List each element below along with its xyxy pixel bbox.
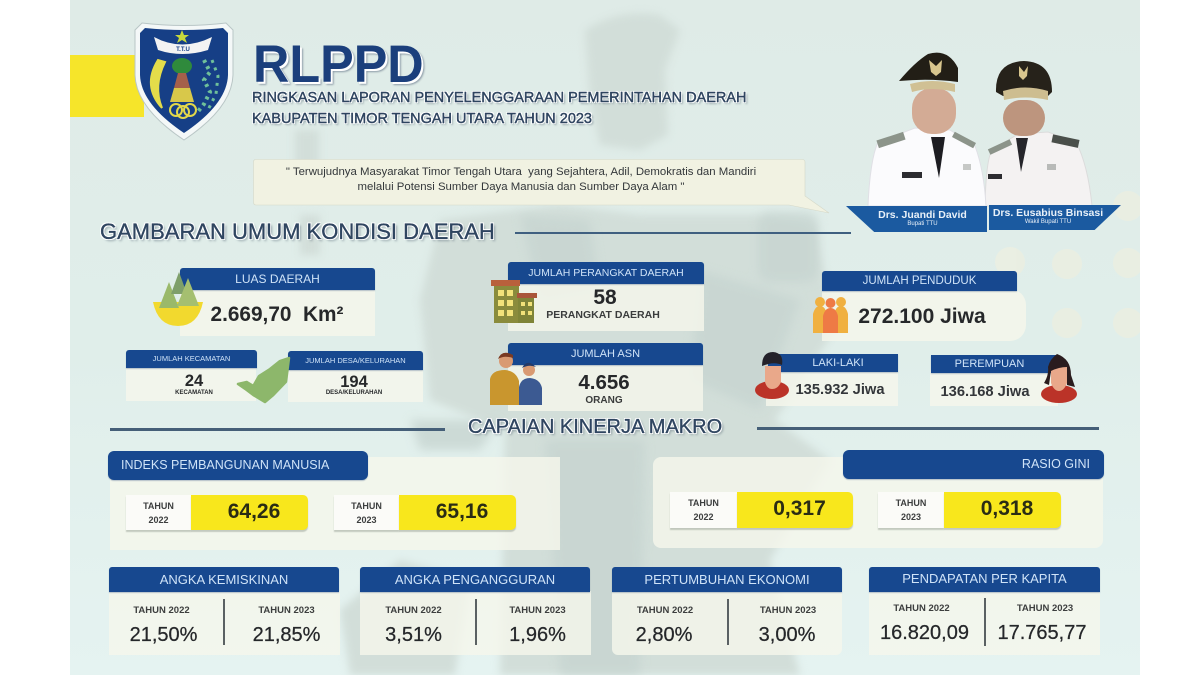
IPM 2023 year: 2023 [356, 515, 377, 525]
panel: jumlah desa [288, 351, 424, 402]
pertumbuhan header: PERTUMBUHAN EKONOMI [644, 572, 810, 587]
pertumbuhan card [612, 591, 842, 655]
pendapatan header: PENDAPATAN PER KAPITA [902, 571, 1067, 586]
heading rule [515, 232, 851, 234]
ASN value: 4.656 [578, 371, 630, 394]
laki-laki card [766, 370, 898, 406]
pengangguran 2023 value: 1,96% [509, 624, 566, 646]
pengangguran header [360, 567, 590, 592]
pertumbuhan 2023 value: 3,00% [759, 624, 815, 646]
IPM card [110, 457, 560, 550]
name plate: Juandi David: Drs. Juandi David [878, 209, 967, 221]
luas header: LUAS DAERAH [235, 272, 320, 286]
pengangguran header: ANGKA PENGANGGURAN [395, 572, 555, 587]
perangkat header: JUMLAH PERANGKAT DAERAH [528, 267, 684, 279]
ASN unit: ORANG [585, 395, 623, 406]
name plate: Juandi David: Bupati TTU [907, 221, 938, 227]
heading: macro performance: CAPAIAN KINERJA MAKRO [468, 416, 722, 438]
ASN header [508, 343, 703, 365]
subtitle: RINGKASAN LAPORAN PENYELENGGARAAN PEMERINTAHAN DAERAH [252, 89, 746, 106]
icon: man [755, 352, 789, 399]
kecamatan header [126, 350, 257, 368]
pengangguran 2022 value: 3,51% [385, 624, 442, 646]
panel: angka kemiskinan [108, 567, 340, 655]
panel: IPM [108, 451, 560, 550]
pertumbuhan header [612, 567, 842, 592]
heading rule left [110, 428, 445, 430]
kecamatan card [126, 367, 256, 401]
IPM 2022 year [126, 495, 191, 530]
perangkat header [508, 262, 704, 284]
panel: jumlah kecamatan [126, 350, 258, 401]
pertumbuhan 2022 label: TAHUN 2022 [637, 605, 693, 616]
kemiskinan 2022 label: TAHUN 2022 [133, 605, 190, 616]
quote text: " Terwujudnya Masyarakat Timor Tengah Utara yang Sejahtera, Adil, Demokratis dan Mandiri [286, 166, 756, 178]
pendapatan 2022 value: 16.820,09 [880, 622, 969, 644]
kemiskinan card [109, 591, 340, 655]
laki-laki value: 135.932 Jiwa [795, 382, 884, 398]
kecamatan unit: KECAMATAN [175, 390, 213, 396]
kecamatan value: 24 [185, 372, 203, 390]
subtitle: KABUPATEN TIMOR TENGAH UTARA TAHUN 2023 [252, 110, 592, 127]
desa card [288, 368, 423, 402]
luas card [180, 289, 375, 336]
icon: trees in bowl [153, 272, 203, 326]
icon: group of people [813, 297, 848, 333]
kemiskinan 2022 value: 21,50% [130, 624, 197, 646]
panel: pertumbuhan ekonomi [612, 567, 842, 655]
pendapatan 2023 value: 17.765,77 [998, 622, 1086, 644]
ASN header: JUMLAH ASN [571, 348, 640, 360]
panel: pendapatan per kapita [868, 567, 1100, 655]
quote text: melalui Potensi Sumber Daya Manusia dan Sumber Daya Alam " [358, 181, 684, 193]
panel: angka pengangguran [360, 567, 591, 655]
desa unit: DESA/KELURAHAN [326, 390, 382, 396]
IPM 2023 year [334, 495, 399, 530]
perempuan header [931, 355, 1056, 373]
kemiskinan 2023 value: 21,85% [253, 624, 320, 646]
kemiskinan header [109, 567, 339, 592]
panel: jumlah penduduk [813, 271, 1026, 341]
kemiskinan divider [223, 599, 224, 645]
panel: perempuan [930, 354, 1077, 406]
panel: luas daerah [153, 268, 376, 336]
penduduk header [822, 271, 1017, 291]
gini 2022 value [737, 492, 853, 528]
luas value: 2.669,70 Km² [211, 303, 343, 326]
desa header [288, 351, 423, 370]
perempuan header: PEREMPUAN [955, 358, 1024, 370]
laki-laki header [768, 354, 898, 372]
pendapatan header [869, 567, 1100, 592]
pertumbuhan 2022 value: 2,80% [636, 624, 692, 646]
gini 2022 year: TAHUN [688, 498, 719, 508]
name plate: Eusabius Binsasi [989, 205, 1121, 230]
gini header: RASIO GINI [1022, 457, 1090, 471]
gini 2023 value [944, 492, 1061, 528]
kemiskinan 2023 label: TAHUN 2023 [258, 605, 315, 616]
IPM 2022 year: TAHUN [143, 501, 174, 511]
perangkat value: 58 [593, 286, 617, 309]
IPM 2023 year: TAHUN [351, 501, 382, 511]
icon: regional crest: T.T.U [176, 47, 190, 53]
luas header [180, 268, 375, 290]
pendapatan card [869, 591, 1100, 655]
kecamatan header: JUMLAH KECAMATAN [153, 354, 230, 363]
pendapatan 2023 label: TAHUN 2023 [1017, 603, 1073, 614]
IPM 2022 value: 64,26 [228, 500, 280, 523]
penduduk value: 272.100 Jiwa [858, 305, 986, 328]
decorative yellow block [70, 55, 144, 117]
panel: jumlah ASN [490, 343, 704, 411]
icon: regional map [236, 356, 290, 404]
vision quote callout [253, 159, 829, 214]
perempuan value: 136.168 Jiwa [940, 384, 1030, 400]
icon: regional crest [134, 22, 234, 140]
icon: buildings [491, 280, 537, 323]
gini 2022 value: 0,317 [773, 497, 826, 520]
penduduk header: JUMLAH PENDUDUK [863, 275, 976, 287]
gini 2023 year: 2023 [901, 512, 921, 522]
pengangguran 2023 label: TAHUN 2023 [509, 605, 566, 616]
portraits of regent and vice regent [868, 52, 1092, 206]
pendapatan divider [984, 598, 986, 646]
gini 2022 year: 2022 [693, 512, 714, 522]
name plate: Eusabius Binsasi: Drs. Eusabius Binsasi [993, 207, 1103, 219]
pertumbuhan divider [727, 599, 728, 645]
gini header [843, 450, 1104, 479]
IPM 2022 year: 2022 [148, 515, 169, 525]
panel: laki-laki [755, 352, 898, 406]
IPM header [108, 451, 368, 480]
desa value: 194 [340, 373, 368, 391]
pendapatan 2022 label: TAHUN 2022 [893, 603, 950, 614]
gini 2023 value: 0,318 [981, 497, 1033, 520]
panel: perangkat daerah [491, 262, 704, 331]
pengangguran divider [475, 599, 476, 645]
perangkat card [508, 282, 704, 331]
perangkat unit: PERANGKAT DAERAH [546, 309, 660, 321]
perempuan card [930, 370, 1058, 406]
icon: civil servants [490, 352, 542, 405]
kemiskinan header: ANGKA KEMISKINAN [160, 572, 288, 587]
quote text [286, 166, 756, 193]
pengangguran card [360, 591, 591, 655]
pertumbuhan 2023 label: TAHUN 2023 [760, 605, 816, 616]
name plate: Juandi David [846, 206, 987, 232]
penduduk card [822, 289, 1026, 341]
IPM 2022 value [191, 495, 308, 530]
panel: rasio gini [653, 450, 1104, 548]
heading: general conditions: GAMBARAN UMUM KONDISI DAERAH [100, 219, 495, 244]
ASN card [508, 363, 703, 411]
title: RLPPD [253, 35, 424, 94]
IPM header: INDEKS PEMBANGUNAN MANUSIA [121, 458, 329, 472]
name plate: Eusabius Binsasi: Wakil Bupati TTU [1025, 219, 1071, 225]
gini 2023 year [878, 492, 944, 528]
desa header: JUMLAH DESA/KELURAHAN [305, 356, 406, 365]
pengangguran 2022 label: TAHUN 2022 [385, 605, 442, 616]
icon: woman [1041, 354, 1077, 403]
heading rule right [757, 427, 1099, 430]
IPM 2023 value [399, 495, 516, 530]
gini 2022 year [670, 492, 737, 528]
gini card [653, 457, 1103, 548]
gini 2023 year: TAHUN [896, 498, 926, 508]
subtitle [252, 89, 748, 127]
laki-laki header: LAKI-LAKI [812, 357, 864, 369]
IPM 2023 value: 65,16 [436, 500, 488, 523]
